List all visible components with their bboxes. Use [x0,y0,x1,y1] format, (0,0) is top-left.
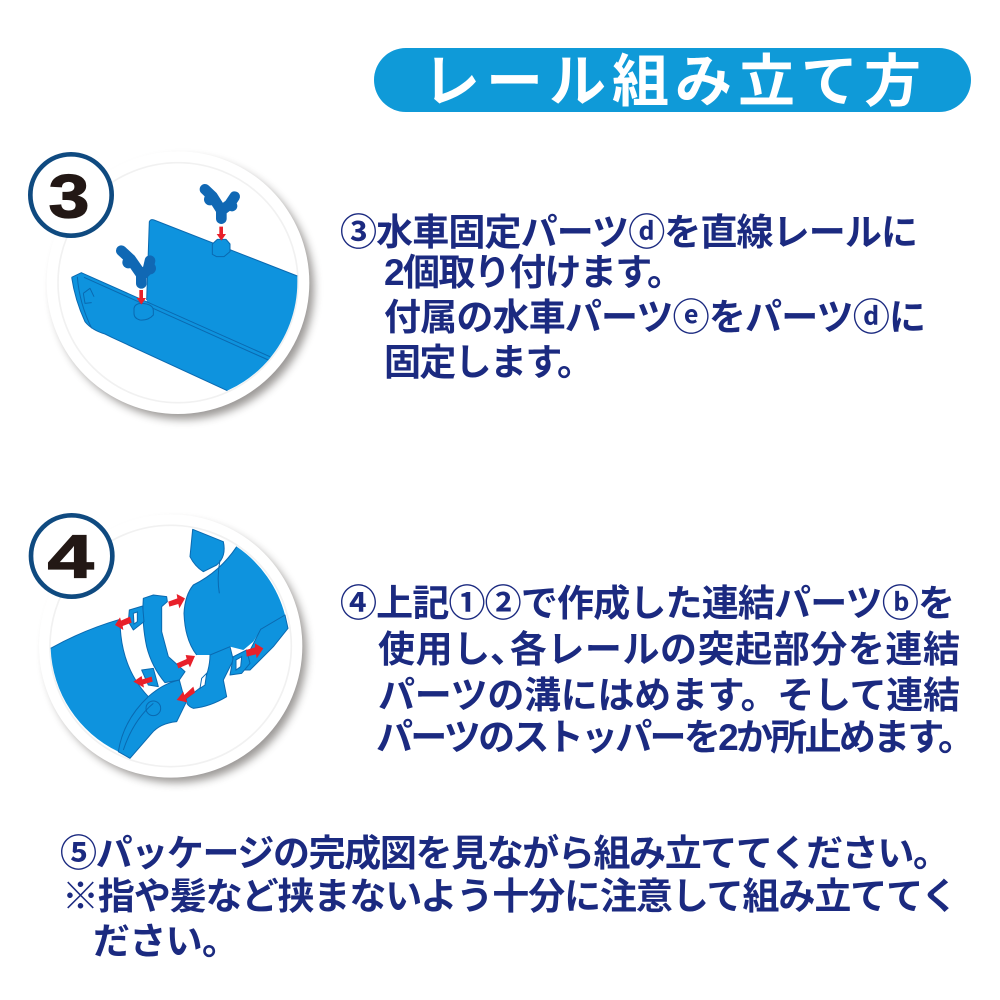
step 5 text and caution: ※指や髪など挟まないよう十分に注意して組み立ててく [62,876,958,917]
number badge 4 [31,515,112,597]
red double arrows [115,594,263,702]
water wheel part lower [121,251,156,283]
number badge 3: 3 [49,163,89,231]
rails [51,529,288,758]
water wheel part upper [204,189,237,219]
step 5 text and caution: ださい。 [93,921,239,962]
circle frame 3 [47,151,314,419]
step 3 text: 付属の水車パーツⓔをパーツⓓに [384,297,926,338]
step 3 text: ③水車固定パーツⓓを直線レールに [340,212,918,253]
step 3 text [340,212,926,383]
step 4 text [340,583,975,758]
step 4 text: 使用し､各レールの突起部分を連結 [378,629,960,670]
number badge 4: 4 [48,523,94,591]
step 4 text: ④上記①②で作成した連結パーツⓑを [340,583,955,624]
step 3 text: 2個取り付けます。 [384,252,684,293]
connector part b left [128,595,185,687]
step 4 illustration [31,514,307,783]
step 4 text: パーツのストッパーを2か所止めます。 [376,717,975,758]
circle frame 4 [39,514,307,783]
number badge 3 [30,154,112,236]
clip part on back wall [212,239,230,257]
step 4 text: パーツの溝にはめます。そして連結 [378,675,960,716]
clip part on front wall [134,303,153,320]
title banner: レール組み立て方 [423,50,921,114]
step 5 text and caution: ⑤パッケージの完成図を見ながら組み立ててください。 [60,833,950,874]
red arrow lower [137,290,146,305]
connector part b right [186,647,250,708]
step 5 text and caution [60,833,958,962]
step 3 text: 固定します。 [384,342,594,383]
step 3 illustration [30,151,314,419]
rail: straight section [72,220,297,391]
red arrow upper [217,227,226,241]
